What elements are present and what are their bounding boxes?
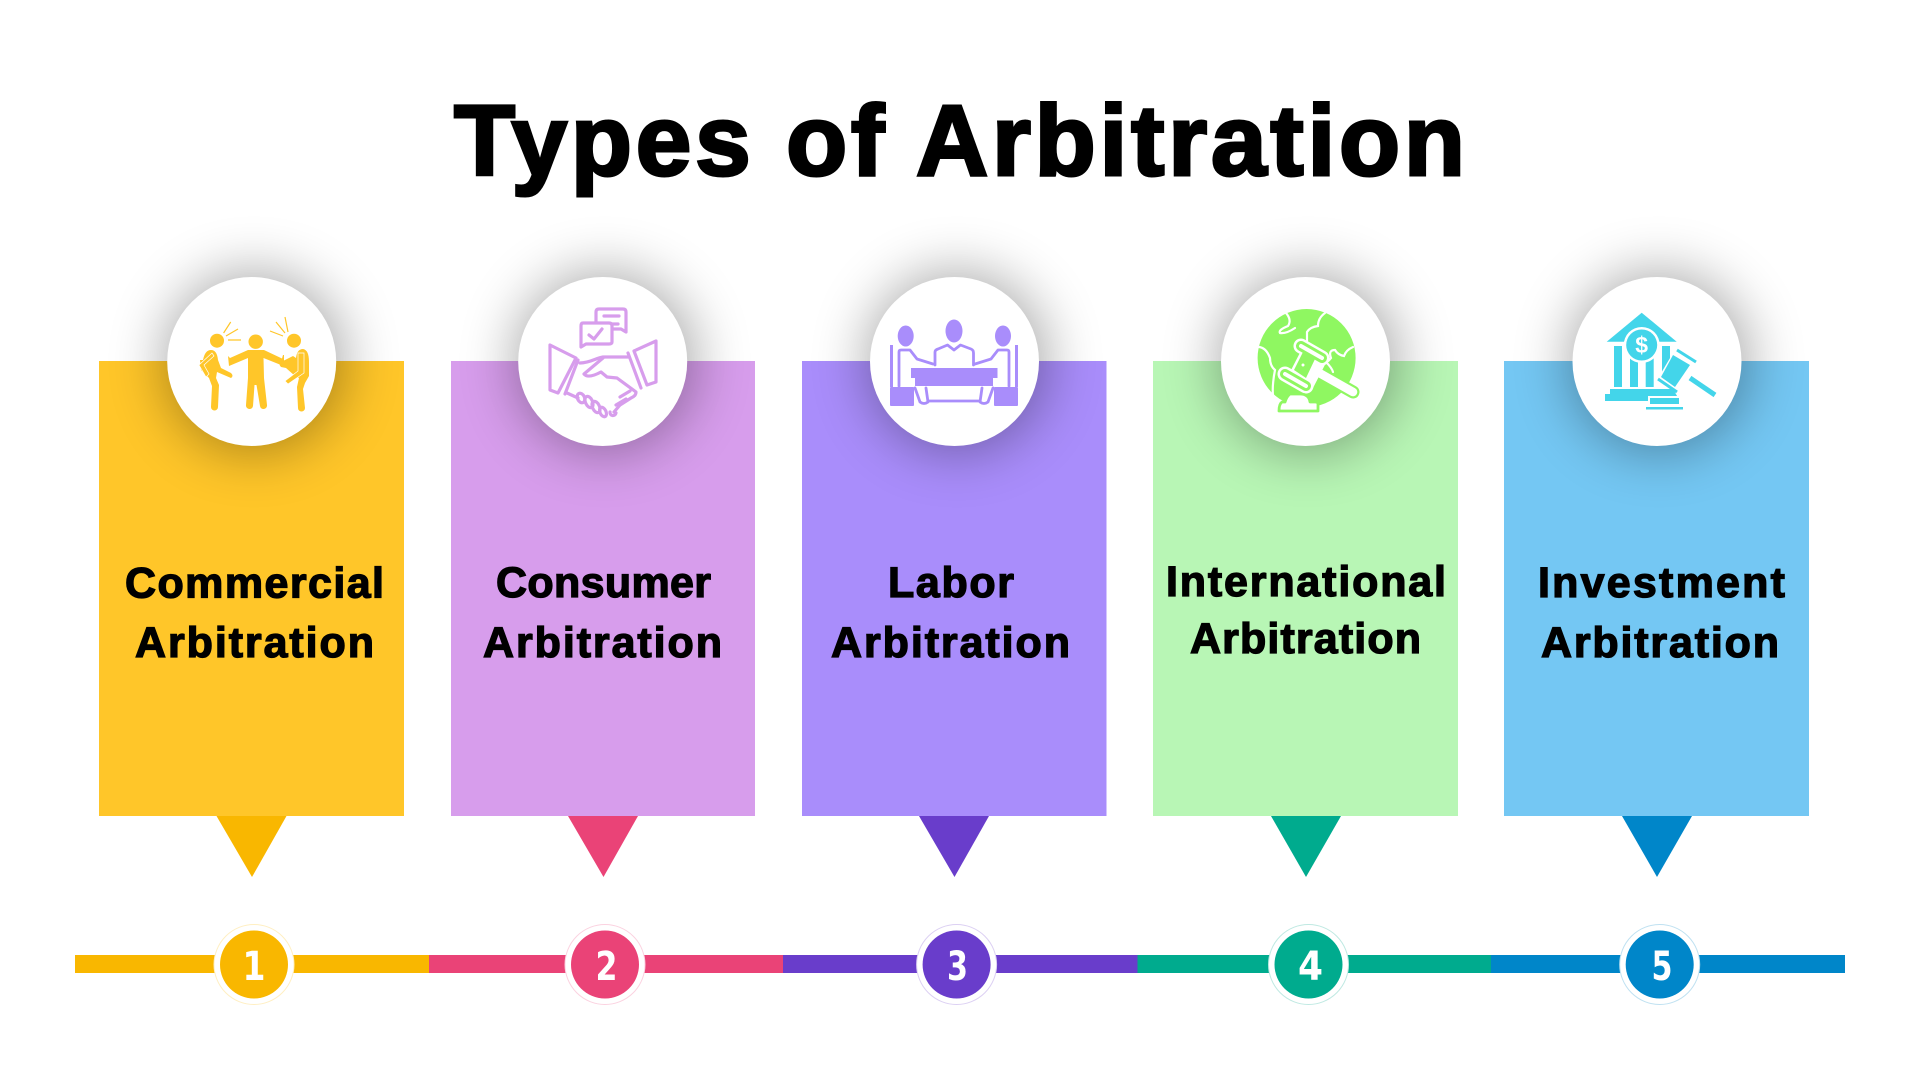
card background xyxy=(802,361,1106,816)
icon circle xyxy=(1572,277,1742,446)
timeline segment 1 xyxy=(75,955,429,973)
label xyxy=(1538,559,1785,667)
timeline segment 3 xyxy=(783,955,1138,973)
step 3 marker xyxy=(917,924,997,1004)
step 3 marker: 3 xyxy=(947,944,968,990)
pointer triangle xyxy=(1271,816,1341,877)
icon: handshake with speech bubbles xyxy=(550,309,656,418)
label: Arbitration xyxy=(1541,619,1779,667)
icon circle xyxy=(1221,277,1390,446)
panel: investment arbitration xyxy=(1504,272,1809,877)
card background xyxy=(99,361,404,816)
step 4 marker xyxy=(1268,924,1348,1004)
step 2 marker: 2 xyxy=(596,944,618,990)
icon circle shadow xyxy=(867,272,1047,452)
step 1 marker: 1 xyxy=(242,944,266,990)
pointer triangle xyxy=(919,816,989,877)
panel: labor arbitration xyxy=(802,272,1106,877)
card background xyxy=(1153,361,1458,816)
icon circle shadow xyxy=(1569,272,1749,452)
timeline segment 2 xyxy=(429,955,783,973)
panel: international arbitration xyxy=(1153,272,1458,877)
label xyxy=(483,559,722,667)
step 5 marker xyxy=(1620,924,1700,1004)
label: Investment xyxy=(1538,559,1785,607)
label xyxy=(831,559,1070,667)
label: Arbitration xyxy=(135,619,374,667)
timeline segment 4 xyxy=(1138,955,1491,973)
icon: arguing people with mediator xyxy=(199,334,309,412)
label xyxy=(1166,558,1446,663)
icon circle xyxy=(167,277,336,446)
step 1 marker xyxy=(214,924,294,1004)
icon circle shadow xyxy=(515,272,695,452)
icon: three people at a table xyxy=(890,320,1018,406)
icon: bank with gavel xyxy=(1605,313,1715,410)
step 4 marker: 4 xyxy=(1298,944,1323,990)
card background xyxy=(1504,361,1809,816)
pointer triangle xyxy=(216,816,286,877)
label: Arbitration xyxy=(1190,615,1421,663)
label: Arbitration xyxy=(831,619,1070,667)
icon: shout rays xyxy=(224,317,288,340)
title: Types of Arbitration xyxy=(454,85,1465,197)
timeline segment 5 xyxy=(1491,955,1845,973)
label: Commercial xyxy=(125,560,384,608)
step 5 marker: 5 xyxy=(1652,944,1672,990)
panel: commercial arbitration xyxy=(99,272,404,877)
icon: globe with gavel xyxy=(1258,309,1356,411)
icon: bank with gavel: $ xyxy=(1635,332,1648,358)
step 2 marker xyxy=(565,924,645,1004)
label: Arbitration xyxy=(483,619,722,667)
label: Labor xyxy=(888,559,1014,607)
icon circle xyxy=(870,277,1039,446)
panel: consumer arbitration xyxy=(451,272,755,877)
timeline xyxy=(75,924,1845,1004)
label xyxy=(125,560,384,667)
icon circle shadow xyxy=(164,272,344,452)
card background xyxy=(451,361,755,816)
icon circle shadow xyxy=(1218,272,1398,452)
icon circle xyxy=(518,277,687,446)
pointer triangle xyxy=(568,816,638,877)
label: International xyxy=(1166,558,1446,606)
label: Consumer xyxy=(496,559,711,607)
pointer triangle xyxy=(1622,816,1692,877)
